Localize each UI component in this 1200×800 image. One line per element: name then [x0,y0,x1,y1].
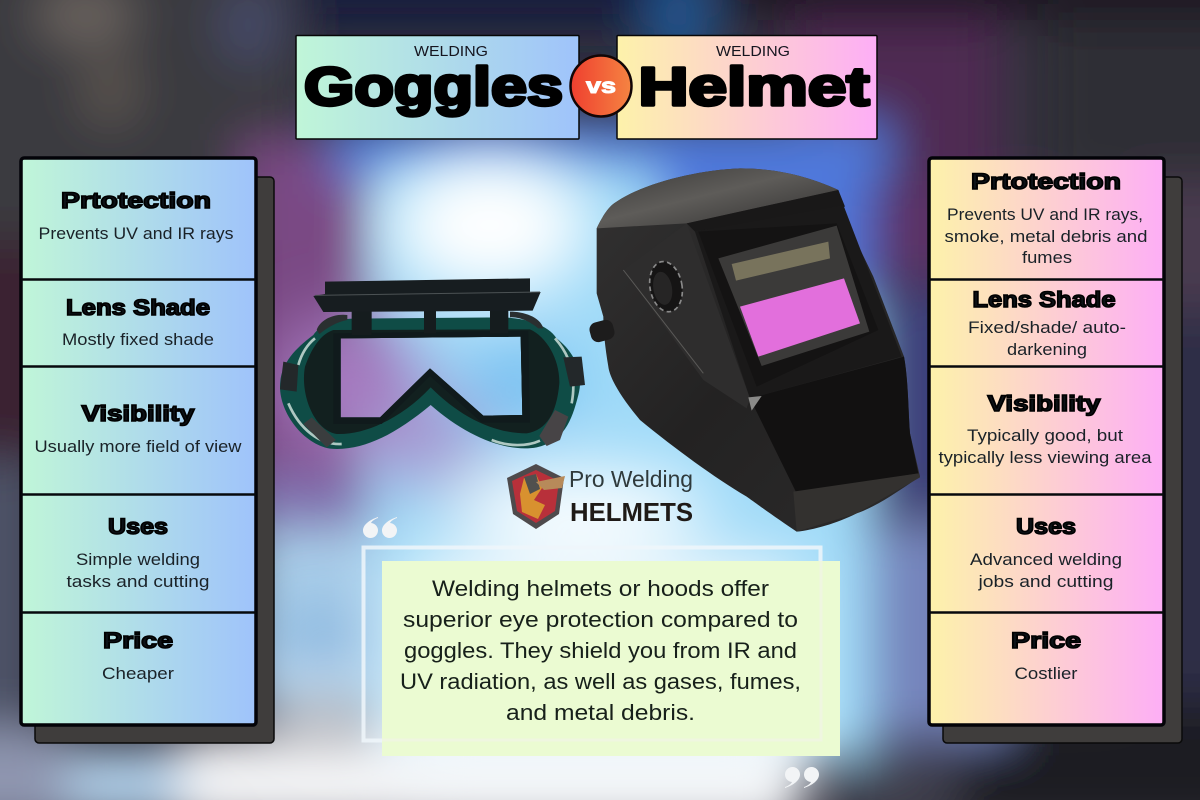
row: protection [38,188,234,243]
row: lens shade [62,295,214,349]
logo: Pro Welding Helmets: HELMETS [570,497,693,527]
panel: goggles comparison [21,158,256,725]
row: protection: smoke, metal debris and [944,228,1148,246]
logo shield icon [507,464,565,529]
row: uses [66,514,210,591]
title: welding goggles: Goggles [304,57,563,117]
title: welding goggles: WELDING [414,43,488,60]
row: price: Price [103,628,173,653]
image: auto-darkening welding helmet [588,168,920,532]
row: lens shade: Fixed/shade/ auto- [968,319,1126,337]
row: protection: Prevents UV and IR rays, [947,206,1143,224]
row: visibility [34,401,242,456]
row: visibility: Usually more field of view [34,438,242,456]
row: lens shade: Lens Shade [66,295,210,320]
vs badge: vs [586,75,616,98]
quote: text box [382,561,840,756]
panel: helmet comparison [929,158,1164,725]
quote: text box: goggles. They shield you from IR and [404,638,797,663]
title: welding helmet: WELDING [716,43,790,60]
row: uses: Uses [1016,514,1076,539]
row: uses: Advanced welding [970,551,1122,569]
quote: text box: superior eye protection compared to [403,607,798,632]
row: uses [970,514,1122,591]
row: price: Cheaper [102,665,175,683]
row: uses: Simple welding [76,551,200,569]
row: uses: Uses [108,514,168,539]
row: price: Costlier [1014,665,1078,683]
row: lens shade: Mostly fixed shade [62,331,214,349]
row: visibility [938,391,1152,467]
panel: goggles comparison shadow [35,177,274,743]
row: protection: Prtotection [971,169,1121,194]
quote: frame outline [364,548,820,740]
logo: Pro Welding Helmets [507,464,693,529]
row: visibility: Visibility [988,391,1101,416]
row: uses: tasks and cutting [66,573,210,591]
vs badge [570,56,632,116]
icon: closing quote mark [785,767,819,788]
quote: text box: and metal debris. [506,700,695,725]
row: visibility: Typically good, but [967,427,1123,445]
row: protection: Prevents UV and IR rays [38,225,234,243]
row: price [102,628,175,683]
row: protection: fumes [1022,249,1072,267]
row: lens shade [968,287,1126,359]
title: welding helmet: Helmet [638,57,870,117]
row: visibility: typically less viewing area [938,449,1152,467]
logo: Pro Welding Helmets: Pro Welding [569,466,693,492]
title: welding goggles [296,36,579,139]
row: protection [944,169,1148,267]
row: price: Price [1011,628,1081,653]
row: protection: Prtotection [61,188,211,213]
row: lens shade: Lens Shade [972,287,1116,312]
icon: opening quote mark [363,517,397,538]
image: welding goggles [280,278,585,449]
row: visibility: Visibility [82,401,195,426]
title: welding helmet [617,36,877,139]
panel: helmet comparison shadow [943,177,1182,743]
quote: text box: UV radiation, as well as gases, fumes, [400,669,801,694]
row: price [1011,628,1081,683]
row: uses: jobs and cutting [977,573,1114,591]
row: lens shade: darkening [1007,341,1087,359]
quote: text box: Welding helmets or hoods offer [432,576,769,601]
